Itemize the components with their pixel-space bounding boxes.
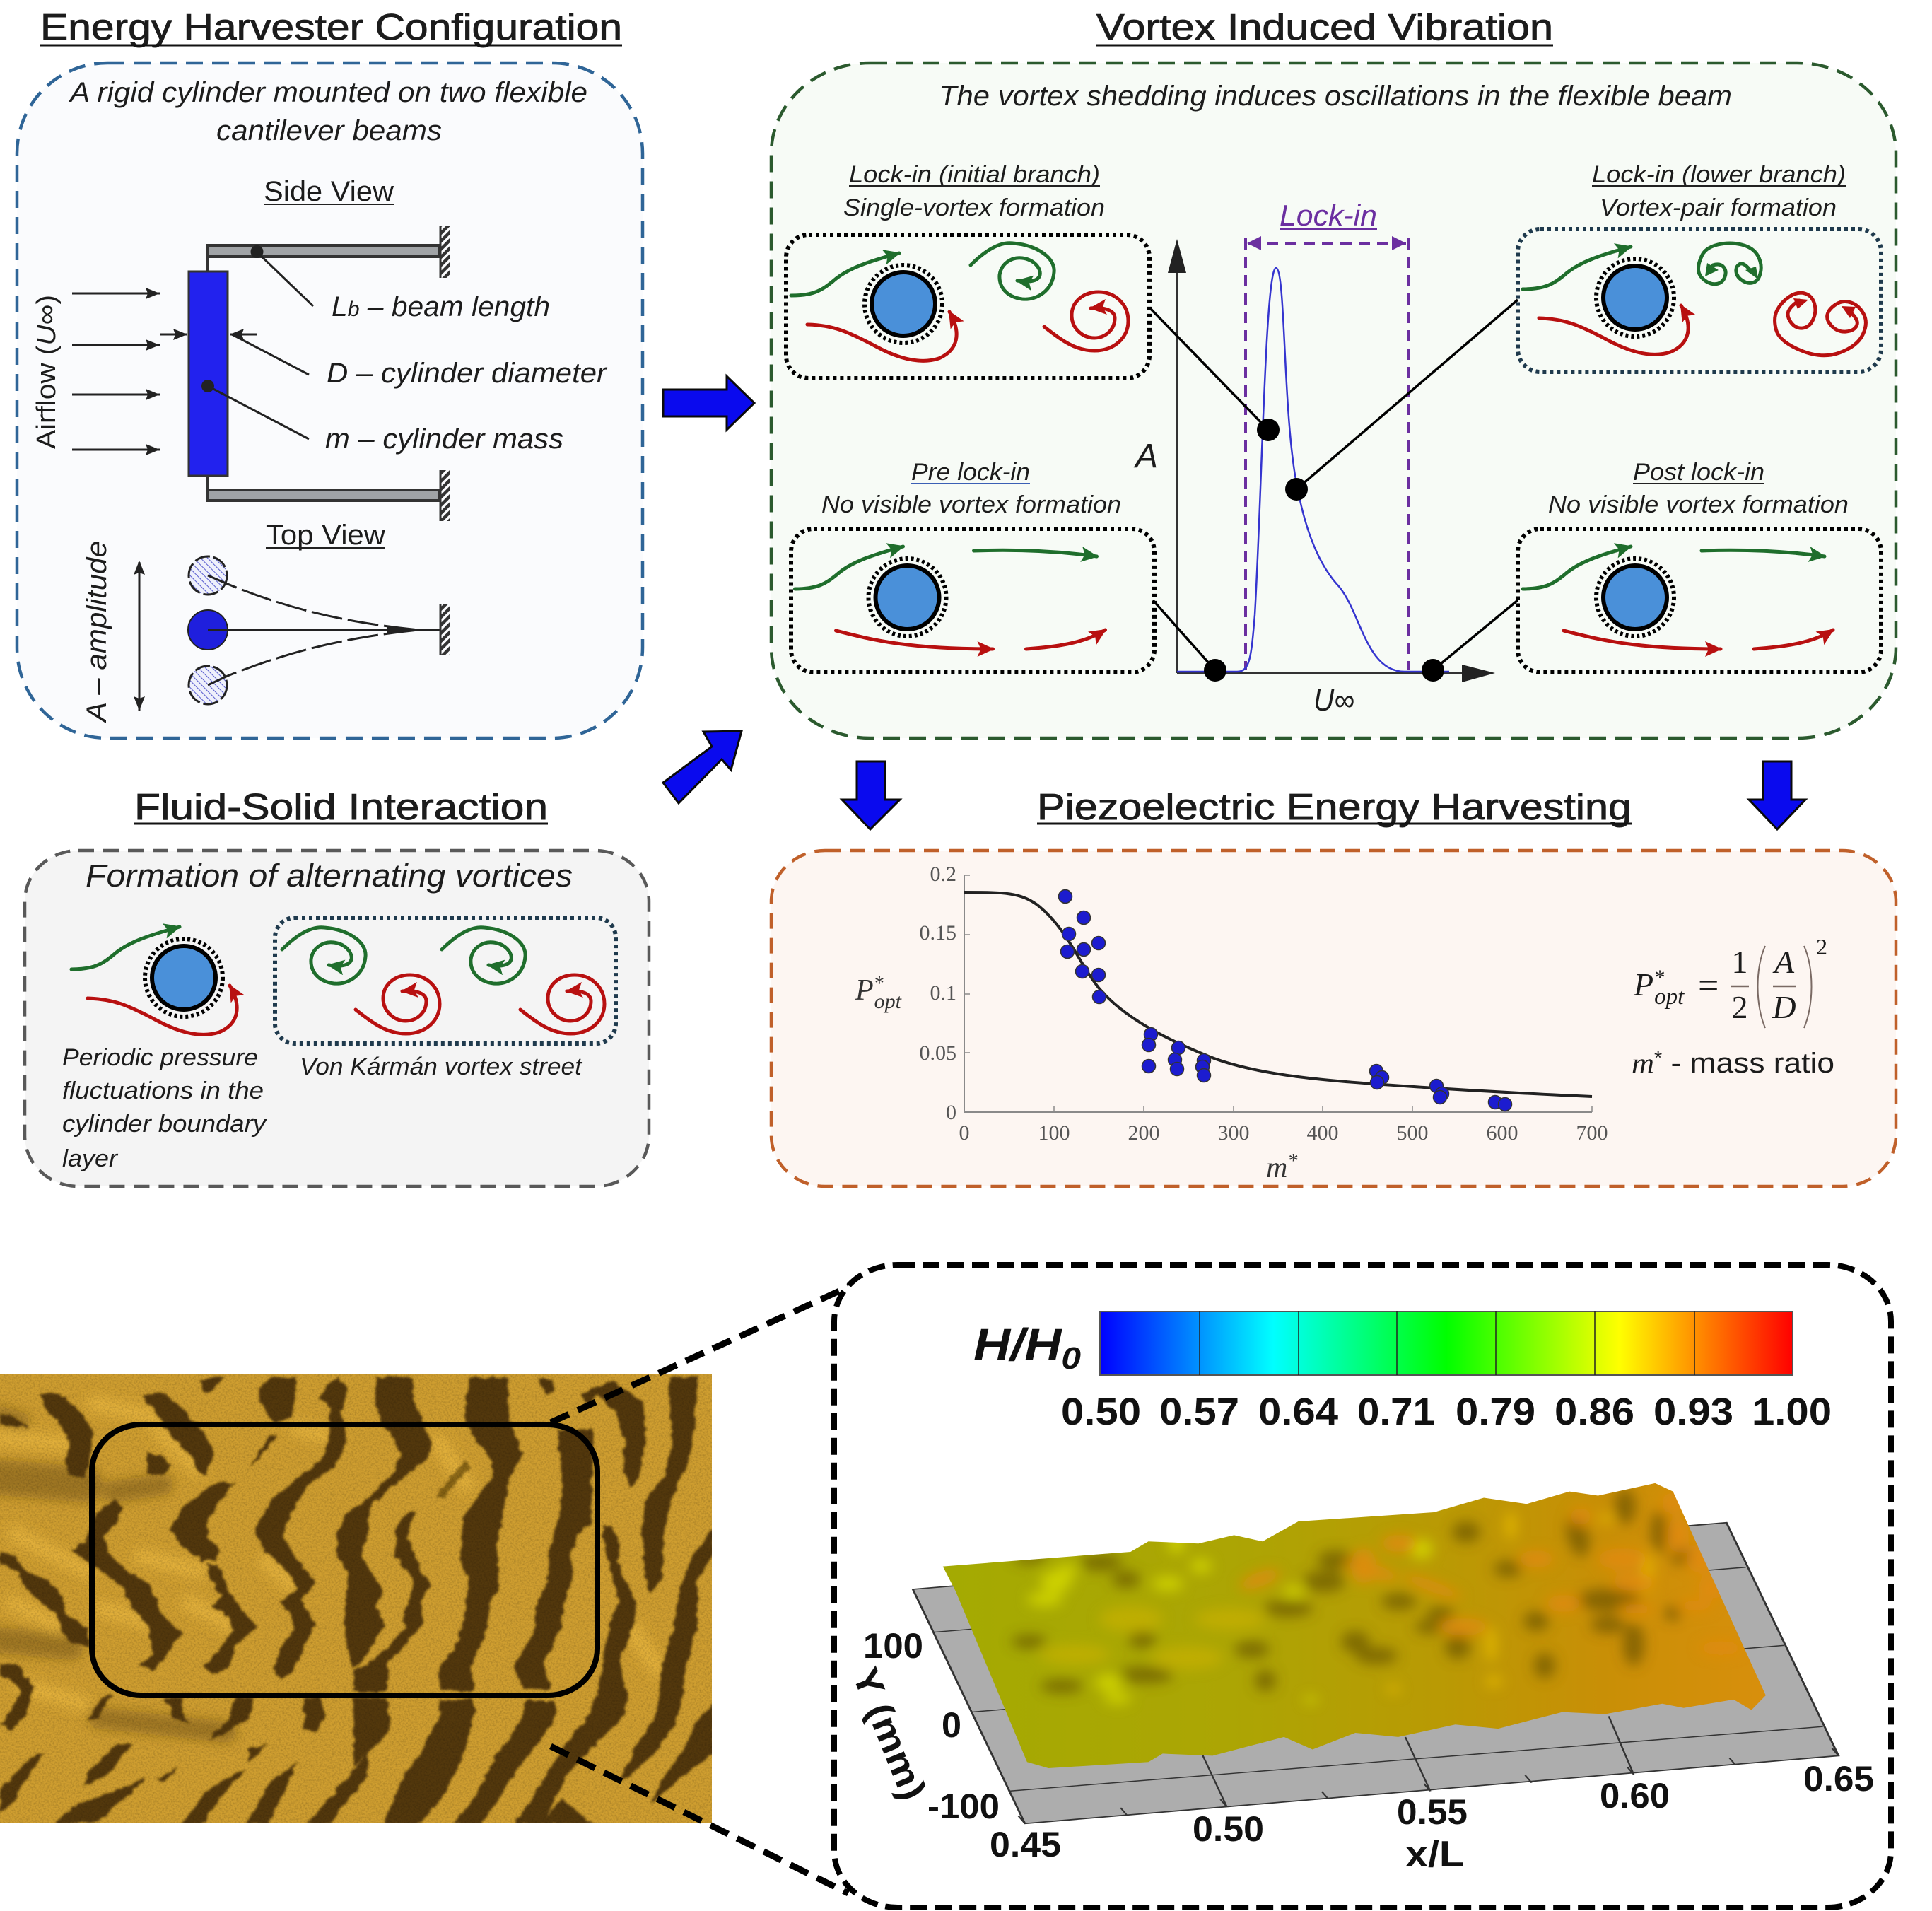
label: cylinder mass: m – cylinder mass [325,423,563,455]
chart: optimal power versus mass ratio [855,863,1608,1184]
x axis tick labels: 400 [1306,1121,1339,1145]
label: amplitude axis: A [1133,438,1158,475]
arrow: configuration to vibration [663,376,754,430]
callout box on photo [92,1425,597,1695]
x axis tick labels: 200 [1128,1121,1159,1145]
labels: y axis ticks: 100 [863,1626,923,1666]
y axis label: opt [874,990,902,1013]
labels: x axis ticks: 0.45 [990,1825,1061,1864]
equation: optimal power [1633,934,1827,1028]
equation: optimal power: * [1653,966,1664,989]
y axis tick labels: 0 [946,1101,956,1124]
equation: optimal power: opt [1654,984,1685,1010]
title: energy harvester configuration: Energy Harvester Configuration [40,7,622,48]
x axis tick labels: 700 [1576,1121,1608,1145]
y axis tick labels: 0.15 [919,921,956,945]
chart: 3d surface height map [913,1478,1839,1823]
label: lock-in: Lock-in [1280,199,1377,232]
text: pre lock-in label: Pre lock-in [911,459,1030,486]
legend: colour bar values: 0.71 [1357,1391,1435,1433]
y axis tick labels: 0.1 [930,981,956,1005]
arrows: incoming airflow [72,293,160,450]
text: post lock-in label: Post lock-in [1633,459,1764,486]
y axis tick labels [919,863,956,1124]
legend: colour bar values: 1.00 [1752,1391,1832,1433]
icon: cylinder with boundary layer flows [71,927,237,1034]
text: pre lock-in label: No visible vortex formation [821,491,1121,518]
equation: optimal power: = [1698,966,1719,1006]
text: post lock-in label [1548,459,1849,518]
arrow: interaction to vibration [663,731,742,803]
text: formation heading: Formation of alternating vortices [86,858,573,894]
x axis tick labels: 500 [1397,1121,1428,1145]
labels: x axis ticks: 0.50 [1193,1809,1264,1849]
text: lock-in lower branch label: Vortex-pair formation [1600,194,1837,221]
text: pressure fluctuation caption: cylinder boundary [62,1111,267,1138]
equation: optimal power: 2 [1732,989,1747,1025]
labels: x axis ticks [990,1759,1874,1864]
lock-in region markers [1246,238,1409,670]
chart: amplitude versus flow speed [1149,238,1518,682]
title: fluid-solid interaction: Fluid-Solid Interaction [134,787,548,828]
legend: colour bar values: 0.86 [1555,1391,1634,1433]
arrow: amplitude [139,562,140,711]
photo: sand ripple field [0,1374,714,1825]
labels: x axis ticks: 0.60 [1600,1776,1670,1816]
x axis tick labels: 100 [1038,1121,1070,1145]
text: panel description: The vortex shedding induces oscillations in the flexible beam [939,81,1732,112]
text: mass ratio note: * [1654,1047,1662,1068]
text: pressure fluctuation caption: Periodic pressure [62,1044,258,1071]
labels: y axis ticks: 0 [942,1705,961,1745]
equation: optimal power: D [1772,989,1796,1025]
x axis tick labels: 300 [1217,1121,1250,1145]
diagram: top view oscillating cylinder [188,556,450,704]
text: post lock-in label: No visible vortex formation [1548,491,1849,518]
x axis tick labels [959,1121,1608,1145]
data points [1059,889,1511,1111]
labels: x axis ticks: 0.65 [1803,1759,1874,1799]
heading: side view: Side View [264,176,394,207]
text: pre lock-in label [821,459,1121,518]
label: y axis title: Y (mm) [844,1662,934,1806]
label: amplitude: A – amplitude [81,541,112,723]
text: pressure fluctuation caption: fluctuations in the [62,1077,264,1104]
text: panel description [69,77,587,146]
label: airflow: Airflow (U∞) [32,295,62,449]
arrow: vibration to harvesting left [842,761,900,829]
label: cylinder diameter: D – cylinder diameter [327,358,608,389]
equation: optimal power: P [1634,966,1653,1003]
arrow: vibration to harvesting right [1749,761,1805,829]
y axis label: * [874,973,884,995]
box: post lock-in [1518,529,1881,672]
text: vortex street caption: Von Kármán vortex street [300,1053,583,1080]
x axis tick labels: 0 [959,1121,970,1145]
y axis tick labels: 0.2 [930,863,956,886]
legend: colour bar values: 0.93 [1653,1391,1733,1433]
x axis label: m [1266,1152,1287,1184]
equation: optimal power: 2 [1816,934,1827,959]
labels: y axis ticks: -100 [927,1787,1000,1826]
diagram: von karman vortex street [275,918,616,1044]
equation: optimal power: 1 [1732,944,1747,980]
connector: zoom lines [551,1285,852,1893]
label: x axis title: x/L [1405,1834,1464,1875]
text: panel description: A rigid cylinder mounted on two flexible [69,77,587,108]
text: mass ratio note: - mass ratio [1662,1048,1834,1079]
labels: x axis ticks: 0.55 [1397,1792,1468,1832]
leader lines and state dots [1149,300,1518,682]
text: lock-in lower branch label: Lock-in (lower branch) [1592,161,1846,188]
legend: colour bar values: 0.64 [1258,1391,1338,1433]
fit curve [964,892,1592,1097]
x axis tick labels: 600 [1486,1121,1518,1145]
equation: optimal power: A [1772,944,1795,980]
text: lock-in initial branch label: Single-vortex formation [843,194,1105,221]
text: lock-in lower branch label [1592,161,1846,221]
legend: colour bar values [1061,1391,1832,1433]
text: panel description: cantilever beams [216,115,442,146]
legend: colour bar [1100,1311,1793,1375]
label: colour bar title: H/H [973,1319,1051,1370]
x axis label: * [1287,1150,1297,1172]
text: mass ratio note: m [1632,1047,1654,1079]
text: pressure fluctuation caption [62,1044,267,1172]
text: lock-in initial branch label: Lock-in (initial branch) [849,161,1100,188]
label: colour bar title: 0 [1061,1341,1082,1376]
y axis tick labels: 0.05 [919,1041,956,1065]
title: piezoelectric energy harvesting: Piezoelectric Energy Harvesting [1037,787,1632,828]
legend: colour bar values: 0.79 [1456,1391,1535,1433]
label: flow speed axis: U∞ [1313,683,1354,718]
panel: fluid-solid interaction [25,851,649,1186]
box: initial branch [786,235,1149,378]
panel: surface measurement inset [834,1265,1891,1907]
panel: vortex induced vibration [771,63,1896,738]
labels: y axis ticks [863,1626,1000,1826]
legend: colour bar values: 0.57 [1159,1391,1239,1433]
title: vortex induced vibration: Vortex Induced Vibration [1096,7,1553,48]
amplitude curve [1177,268,1449,672]
box: lower branch [1518,229,1881,372]
y axis label: P [855,974,874,1007]
text: lock-in initial branch label [843,161,1105,221]
text: pressure fluctuation caption: layer [62,1145,119,1172]
panel: energy harvester configuration [17,63,643,738]
box: pre lock-in [791,529,1154,672]
panel: piezoelectric energy harvesting [771,851,1896,1186]
legend: colour bar values: 0.50 [1061,1391,1141,1433]
label: beam length: Lb – beam length [332,291,550,322]
diagram: side view cantilever and cylinder [160,226,450,521]
heading: top view: Top View [266,520,385,551]
